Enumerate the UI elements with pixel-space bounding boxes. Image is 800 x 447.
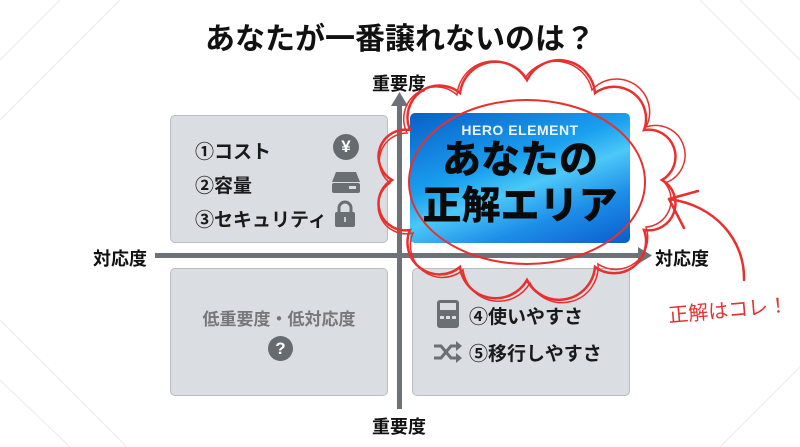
item list [195, 142, 327, 231]
panel: hero element [410, 113, 630, 243]
icon: yen [333, 134, 359, 160]
icon: question: ? [275, 339, 286, 358]
icon: storage drive [332, 172, 360, 193]
title: あなたが一番譲れないのは？ [205, 23, 595, 56]
item list: ③セキュリティ [195, 210, 327, 231]
panel: bottom-left low importance [170, 268, 388, 396]
icon: yen: ¥ [341, 137, 351, 156]
icon: tablet [437, 300, 459, 328]
item 4: ④使いやすさ [469, 307, 583, 328]
item list: ②容量 [195, 176, 252, 197]
item list: ①コスト [195, 142, 271, 163]
panel: bottom-right high response [412, 268, 630, 396]
hero label: HERO ELEMENT [461, 122, 579, 138]
icon: shuffle [434, 341, 462, 363]
axis label: left response: 対応度 [93, 249, 147, 269]
hero text [422, 139, 618, 228]
low label: 低重要度・低対応度 [202, 310, 356, 329]
axis label: bottom importance: 重要度 [372, 417, 426, 437]
hero text: 正解エリア [422, 185, 618, 228]
panel: top-left high importance low response [170, 115, 388, 243]
icon: lock [335, 200, 355, 227]
callout: answer note: 正解はコレ！ [667, 295, 789, 327]
item 5: ⑤移行しやすさ [469, 344, 602, 365]
icon: question [268, 336, 293, 361]
hero text: あなたの [442, 139, 598, 182]
axis label: top importance: 重要度 [372, 74, 426, 94]
axis label: right response: 対応度 [655, 249, 709, 269]
